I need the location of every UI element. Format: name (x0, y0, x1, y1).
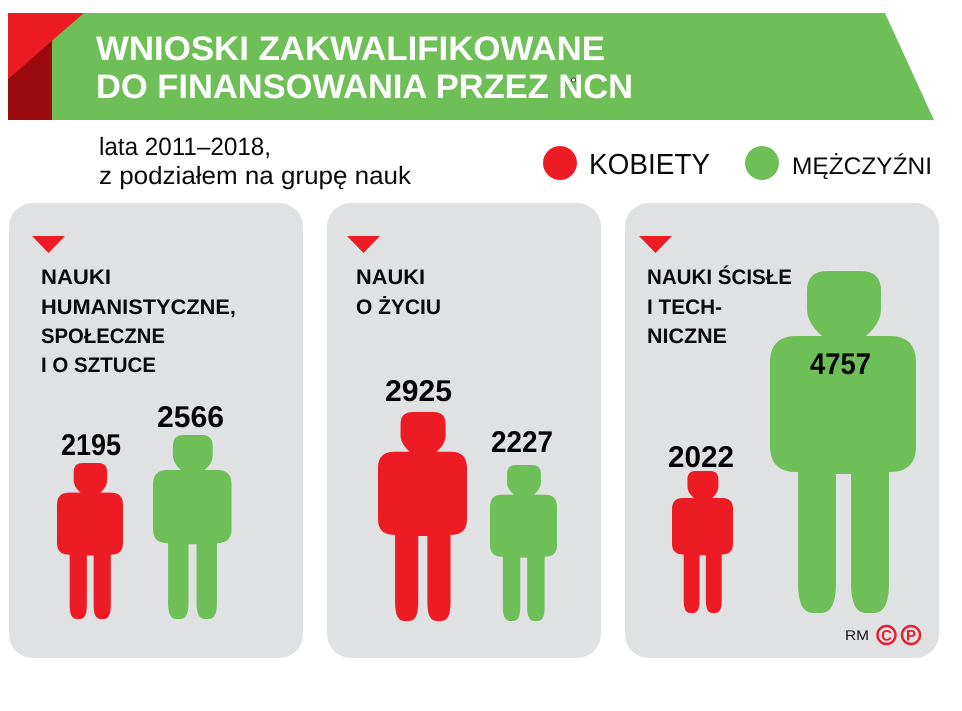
figure: kobiety 2925 (378, 375, 467, 621)
heading: nauki humanistyczne (41, 266, 236, 377)
legend: kobiety: KOBIETY (589, 149, 710, 181)
title: DO FINANSOWANIA PRZEZ NCN (96, 68, 633, 106)
figure: mężczyźni 4757 (770, 271, 916, 613)
legend: kobiety (543, 146, 710, 181)
legend: mężczyźni: MĘŻCZYŹNI (792, 153, 932, 180)
figure: mężczyźni 2227: 2227 (491, 426, 553, 459)
figure: kobiety 2925: 2925 (385, 375, 452, 408)
subtitle: lata 2011–2018, (99, 133, 271, 161)
panel: nauki ścisłe i techniczne (625, 203, 939, 658)
title: WNIOSKI ZAKWALIFIKOWANE (96, 30, 605, 68)
figure: mężczyźni 2566: 2566 (157, 401, 224, 434)
figure: mężczyźni 4757: 4757 (810, 348, 871, 381)
heading: nauki ścisłe i techniczne: NAUKI ŚCISŁE (647, 265, 792, 289)
subtitle (99, 133, 412, 190)
subtitle: z podziałem na grupę nauk (99, 162, 412, 190)
heading: nauki o życiu: NAUKI (356, 266, 425, 289)
figure: kobiety 2195 (57, 429, 123, 619)
panel: nauki humanistyczne (9, 203, 303, 658)
heading: nauki humanistyczne: SPOŁECZNE (41, 325, 165, 348)
heading: nauki humanistyczne: I O SZTUCE (41, 354, 156, 377)
heading: nauki o życiu: O ŻYCIU (356, 296, 441, 319)
figure: kobiety 2195: 2195 (61, 429, 121, 462)
credit: RM (C) (P): P (906, 628, 916, 644)
credit: RM (C) (P): C (881, 628, 892, 644)
legend: mężczyźni (745, 146, 932, 180)
heading: nauki humanistyczne: NAUKI (41, 266, 111, 289)
credit: RM (C) (P): RM (845, 627, 869, 643)
figure: kobiety 2022 (668, 441, 734, 613)
heading: nauki ścisłe i techniczne: NICZNE (647, 325, 727, 348)
heading: nauki o życiu (356, 266, 441, 319)
panel: nauki o życiu (327, 203, 601, 658)
figure: mężczyźni 2566 (153, 401, 232, 619)
title (96, 30, 633, 106)
heading: nauki ścisłe i techniczne: I TECH- (647, 296, 722, 319)
credit: RM (C) (P) (845, 626, 920, 644)
header banner (8, 13, 934, 120)
figure: kobiety 2022: 2022 (668, 441, 734, 474)
figure: mężczyźni 2227 (490, 426, 557, 621)
heading: nauki ścisłe i techniczne (647, 265, 792, 348)
heading: nauki humanistyczne: HUMANISTYCZNE, (41, 296, 236, 319)
